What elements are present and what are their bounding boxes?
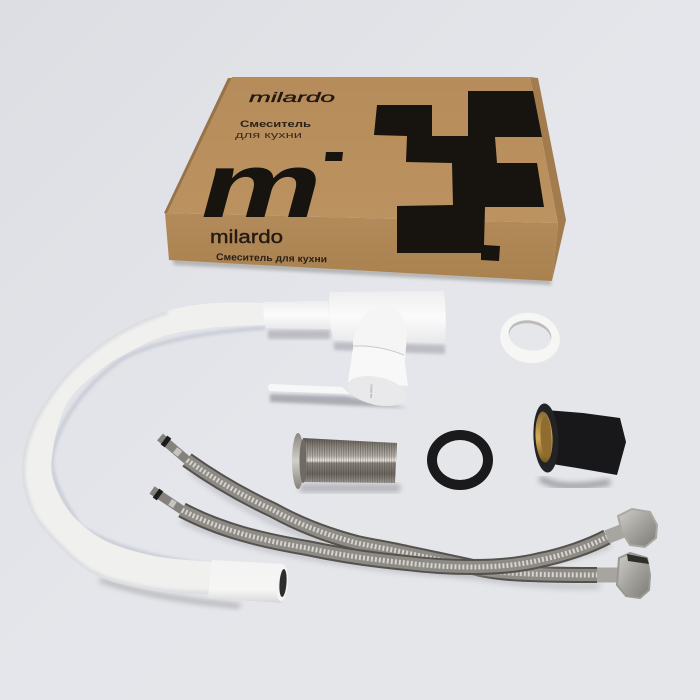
pipe flange [292,433,304,489]
box top face [167,77,558,223]
front logo: milardo [210,227,283,247]
coupling nut A: lower right [597,553,650,598]
box right flap [530,77,566,281]
white flexible spout hose [22,303,289,606]
handle end cap [345,371,409,411]
box left flap [164,78,234,213]
braid A [187,460,597,575]
black square dot [325,152,343,161]
front label: Смеситель для кухни [216,252,327,265]
lever [268,384,350,394]
faucet body [263,291,446,411]
fitting A [160,437,187,460]
black rubber washer [427,430,493,490]
coupling nut B: upper right [607,509,657,547]
black pixel pattern [374,91,544,261]
hose end sleeve [208,560,289,603]
fitting B [152,490,182,510]
product photo scene [22,77,658,610]
braid B [182,510,607,567]
box front face [165,213,558,281]
braided hose B [152,490,657,573]
black plastic nut with brass insert [532,403,626,486]
top label: Смеситель [240,119,311,130]
white sealing ring [496,308,564,368]
threaded steel pipe [292,433,400,492]
handle end cap: MILARDO [369,384,373,398]
top logo: milardo [249,89,335,105]
brass insert [534,411,554,463]
hose collar [263,301,330,329]
mixer handle barrel [348,348,408,386]
cardboard box [164,77,566,285]
nut hex body [546,410,626,475]
sleeve opening [275,565,289,601]
hose tube [22,303,265,595]
top label: для кухни [235,130,302,141]
braided hose A [160,437,650,598]
main cylinder [329,291,446,343]
pipe body [303,438,397,483]
top label [235,119,311,141]
big m logo: m [189,134,337,237]
t-branch [353,308,407,362]
nut flange [532,403,560,473]
